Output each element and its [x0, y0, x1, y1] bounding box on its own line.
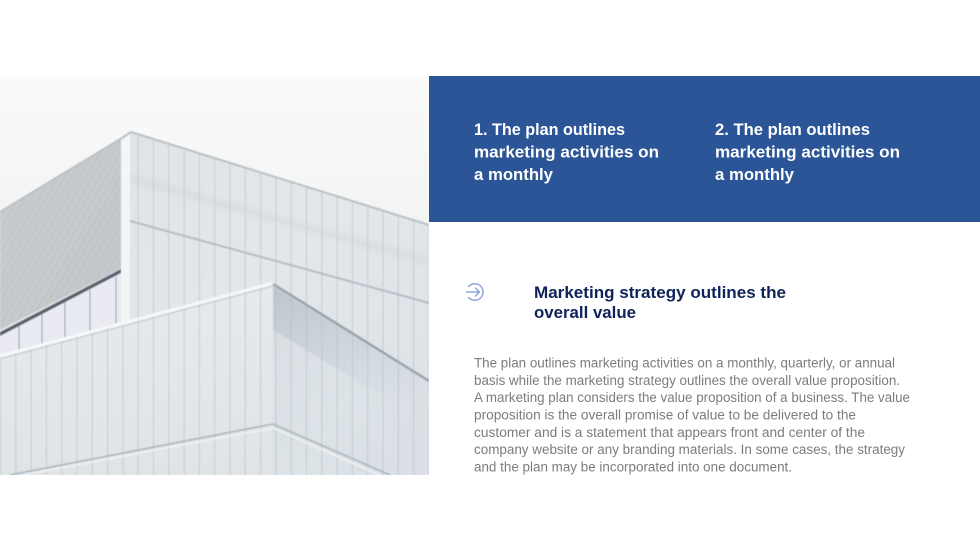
statement 1: marketing activities on — [474, 142, 659, 162]
body paragraph — [474, 356, 910, 474]
body paragraph: customer and is a statement that appears front and center of the — [474, 425, 865, 440]
body paragraph: A marketing plan considers the value proposition of a business. The value — [474, 390, 910, 405]
statement 2: marketing activities on — [715, 142, 900, 162]
body paragraph: proposition is the overall promise of value to be delivered to the — [474, 408, 856, 422]
statement 2: 2. The plan outlines — [715, 120, 870, 139]
top panel: blue band with two numbered statements — [429, 76, 980, 222]
subheading: overall value — [534, 303, 636, 322]
statement 1: 1. The plan outlines — [474, 120, 625, 139]
statement 2: a monthly — [715, 165, 795, 184]
body paragraph: and the plan may be incorporated into one document. — [474, 460, 792, 474]
photo: white building corner against pale sky — [0, 130, 429, 475]
subheading: Marketing strategy outlines the — [534, 283, 786, 302]
subheading — [534, 283, 786, 322]
icon: arrow entering circle — [466, 284, 483, 300]
statement 1 — [474, 120, 659, 184]
body paragraph: basis while the marketing strategy outlines the overall value proposition. — [474, 373, 900, 388]
statement 1: a monthly — [474, 165, 554, 184]
body paragraph: The plan outlines marketing activities on a monthly, quarterly, or annual — [474, 356, 895, 370]
body paragraph: company website or any branding materials. In some cases, the strategy — [474, 442, 905, 457]
statement 2 — [715, 120, 900, 184]
